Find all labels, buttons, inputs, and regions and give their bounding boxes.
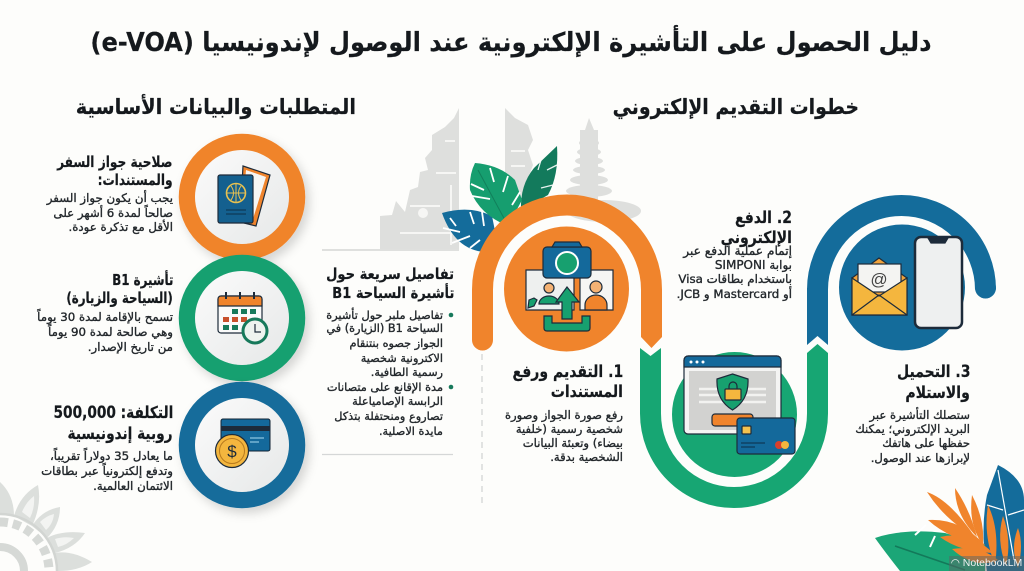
mandala ornament <box>0 482 92 571</box>
text block: passport validity: صلاحية جواز السفر <box>58 153 173 171</box>
step 2 arch <box>640 344 828 498</box>
text block: B1 visa: (السياحة والزيارة) <box>66 289 173 307</box>
text block: step 2: 2. الدفع <box>735 208 792 227</box>
title: دليل الحصول على التأشيرة الإلكترونية عند الوصول لإندونيسيا (e-VOA) <box>90 28 931 58</box>
text block: step 1: الشخصية بدقة. <box>550 450 623 464</box>
text block: cost: روبية إندونيسية <box>68 424 173 443</box>
temple gate silhouette <box>380 108 533 249</box>
step 1 arch <box>472 205 662 352</box>
text block: cost <box>41 403 173 493</box>
text block: B1 visa <box>36 270 173 354</box>
text block: step 3 <box>855 362 970 466</box>
icon: calendar and clock <box>218 292 267 343</box>
text block: step 1: 1. التقديم ورفع <box>512 362 623 381</box>
panel: requirement circle, payment <box>187 390 297 500</box>
text block: B1 quick details: تفاصيل ملبر حول تأشيرة <box>326 309 443 322</box>
text block: B1 quick details: مايدة الاصلية. <box>379 425 443 438</box>
text block: step 1: شخصية رسمية (خلفية <box>516 422 623 436</box>
text block: step 2: الإلكتروني <box>721 228 792 247</box>
icon: camera and upload <box>526 242 613 331</box>
text block: cost: ما يعادل 35 دولاراً تقريباً، <box>50 449 173 463</box>
text block: B1 quick details: السياحة B1 (الزيارة) في <box>326 322 443 335</box>
text block: step 3: ستصلك التأشيرة عبر <box>869 408 970 422</box>
bullet dots <box>449 313 453 389</box>
text block: B1 visa: تأشيرة B1 <box>112 271 173 289</box>
text block: step 3: لإبرازها عند الوصول. <box>871 451 970 465</box>
text block: B1 quick details: الجواز جصوه بنتنقام <box>349 337 443 350</box>
divider top <box>322 249 459 251</box>
text block: step 1: المستندات <box>551 382 623 401</box>
text block: B1 quick details: مدة الإقانع على متصانات <box>327 381 443 394</box>
text block: B1 visa: تسمح بالإقامة لمدة 30 يوماً <box>37 310 173 324</box>
text block: step 2 <box>677 208 792 302</box>
text block: step 3: 3. التحميل <box>896 362 970 381</box>
text block: passport validity: صالحاً لمدة 6 أشهر على <box>53 206 173 220</box>
heading: requirements: المتطلبات والبيانات الأساسية <box>76 95 356 119</box>
text block: step 2: بوابة SIMPONI <box>715 258 792 272</box>
divider <box>322 454 453 456</box>
text block: B1 quick details: تأشيرة السياحة B1 <box>332 284 454 302</box>
text block: B1 quick details: رسمية الطافية. <box>371 366 443 379</box>
icon: envelope and phone: @ <box>870 270 888 289</box>
NotebookLM badge: ◠ NotebookLM <box>951 557 1022 569</box>
text block: step 1 <box>505 362 623 464</box>
text block: step 1: رفع صورة الجواز وصورة <box>505 408 623 422</box>
text block: passport validity: الأقل مع تذكرة عودة. <box>68 220 173 234</box>
text block: B1 quick details: تصاروع ومنحتفلة بتذكل <box>334 410 443 423</box>
text block: step 1: بيضاء) وتعبئة البيانات <box>523 436 623 450</box>
tropical leaves, bottom right <box>875 465 1024 571</box>
panel: requirement circle, calendar <box>187 263 297 373</box>
text block: B1 visa: من تاريخ الإصدار. <box>88 340 173 354</box>
text block: B1 quick details: الرابسة الإصامياعلة <box>352 395 443 408</box>
text block: passport validity: يجب أن يكون جواز السفر <box>47 191 173 205</box>
text block: step 2: إتمام عملية الدفع عبر <box>683 244 792 258</box>
icon: envelope and phone <box>852 237 962 328</box>
icon: card and coin: $ <box>227 442 237 461</box>
text block: step 2: أو Mastercard و JCB. <box>677 287 792 301</box>
text block: passport validity: والمستندات: <box>98 171 173 189</box>
text block: B1 quick details: الاكترونية شخصية <box>361 352 443 365</box>
text block: passport validity <box>46 153 173 234</box>
heading: application steps: خطوات التقديم الإلكتروني <box>613 95 859 119</box>
text block: step 3: البريد الإلكتروني؛ يمكنك <box>855 422 970 436</box>
text block: cost: الائتمان العالمية. <box>93 479 173 493</box>
text block: B1 visa: وهي صالحة لمدة 90 يوماً <box>48 325 173 339</box>
text block: step 2: باستخدام بطاقات Visa <box>678 272 792 286</box>
text block: step 3: والاستلام <box>906 383 970 402</box>
text block: step 3: حفظها على هاتفك <box>882 436 970 450</box>
text block: cost: التكلفة: 500,000 <box>53 403 173 422</box>
text block: B1 quick details <box>326 265 454 438</box>
tropical leaves, top <box>442 146 557 252</box>
text block: cost: وتدفع إلكترونياً عبر بطاقات <box>41 464 173 478</box>
step 3 arch <box>807 206 996 350</box>
panel: requirement circle, passport <box>187 142 297 252</box>
pagoda silhouette <box>566 118 641 222</box>
text block: B1 quick details: تفاصيل سريعة حول <box>326 265 454 283</box>
icon: browser with shield and card <box>684 356 795 454</box>
icon: passport <box>218 166 270 226</box>
dashed connector <box>481 354 483 508</box>
